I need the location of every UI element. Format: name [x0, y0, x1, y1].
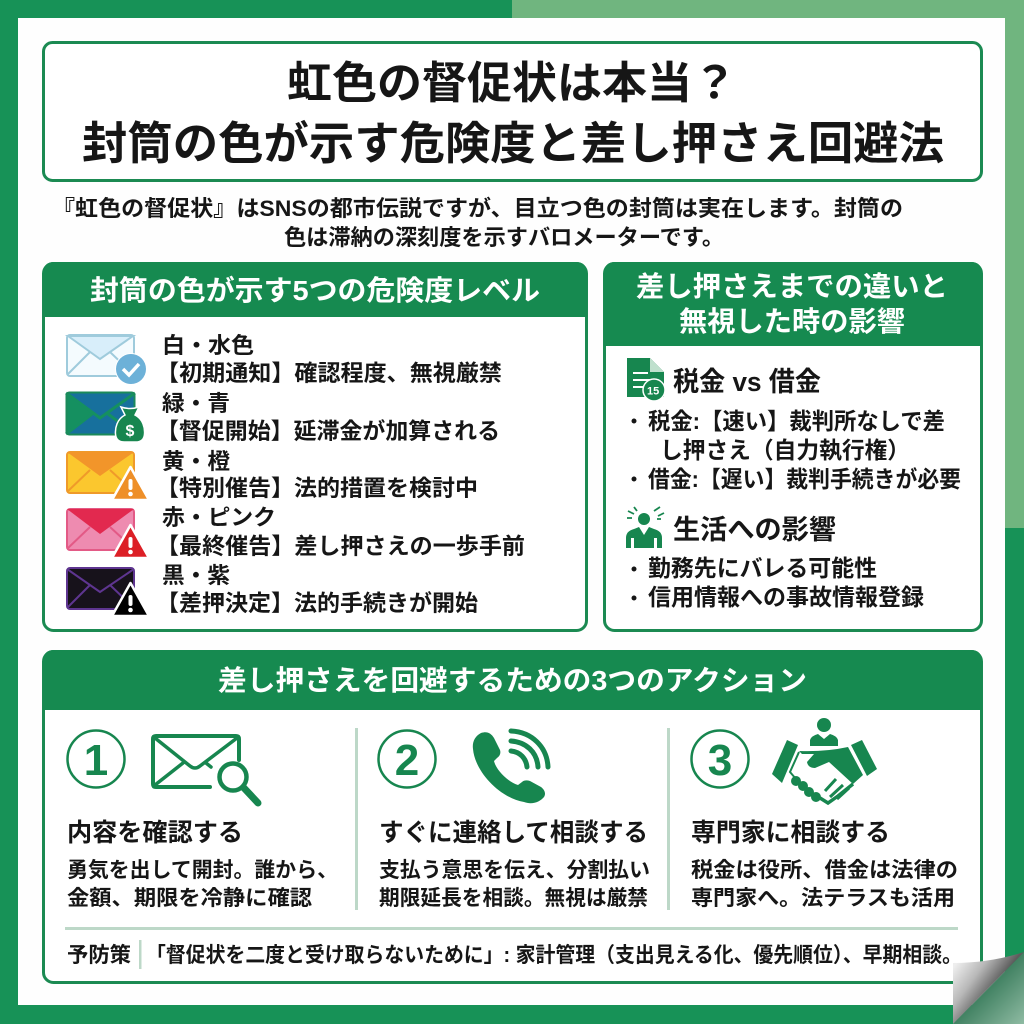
action 1 body: 金額、期限を冷静に確認 [67, 887, 312, 910]
life impact bullets [632, 555, 924, 610]
icon: yellow and orange envelope with warning [67, 452, 149, 500]
heading: tax vs debt: 税金 vs 借金 [673, 367, 821, 397]
action 1 body: 勇気を出して開封。誰から、 [67, 859, 338, 882]
icon: black and purple envelope with warning [67, 568, 149, 616]
page curl [953, 952, 1024, 1024]
action 1 heading: 内容を確認する [67, 819, 243, 847]
level 5 text: 黒・紫 [162, 563, 230, 588]
panel heading: 差し押さえを回避するための3つのアクション [218, 665, 807, 696]
tax and debt bullets [632, 408, 961, 492]
level 5 text: 【差押決定】法的手続きが開始 [156, 590, 478, 616]
intro text [52, 196, 903, 250]
icon: tax document with date [627, 358, 665, 401]
number 2 [378, 730, 436, 788]
action 2 body: 支払う意思を伝え、分割払い [379, 859, 650, 882]
tax and debt bullets: 借金:【遅い】裁判手続きが必要 [648, 466, 961, 492]
panel: three actions [43, 650, 982, 982]
action 3 [667, 718, 958, 910]
number 3 [692, 730, 748, 788]
prevention note: 予防策 [67, 944, 131, 967]
level 1 text [156, 333, 502, 386]
action 1 body [67, 859, 338, 910]
intro text: 色は滞納の深刻度を示すバロメーターです。 [284, 225, 724, 250]
action 1 [67, 730, 338, 910]
level 4 text: 赤・ピンク [162, 505, 276, 530]
icon: green and blue envelope with money bag: $ [126, 423, 134, 440]
title line 2: 封筒の色が示す危険度と差し押さえ回避法 [82, 118, 944, 169]
number 3: 3 [708, 736, 732, 785]
level 2 text [156, 391, 500, 444]
title line 1: 虹色の督促状は本当？ [287, 59, 737, 108]
action 2 body: 期限延長を相談。無視は厳禁 [379, 887, 648, 910]
icon: stressed person [626, 507, 664, 548]
prevention note [67, 940, 962, 969]
heading: impact on life: 生活への影響 [673, 515, 836, 545]
action 2 body [379, 859, 650, 910]
tax and debt bullets: 税金:【速い】裁判所なしで差 [648, 408, 945, 434]
level 2 text: 【督促開始】延滞金が加算される [156, 418, 500, 444]
life impact bullets: 信用情報への事故情報登録 [648, 584, 924, 610]
panel heading: 差し押さえまでの違いと [636, 271, 948, 302]
action 3 body [691, 859, 958, 910]
number 1 [68, 730, 124, 788]
action 3 body: 専門家へ。法テラスも活用 [691, 887, 955, 910]
level 2 text: 緑・青 [162, 391, 230, 416]
icon: white and light blue envelope [67, 335, 147, 385]
action 3 body: 税金は役所、借金は法律の [691, 859, 958, 882]
action 2 [355, 728, 650, 910]
action 2 heading: すぐに連絡して相談する [379, 819, 648, 847]
panel heading: 封筒の色が示す5つの危険度レベル [90, 274, 540, 306]
panel: envelope colour danger levels [43, 262, 587, 630]
intro text: 『虹色の督促状』はSNSの都市伝説ですが、目立つ色の封筒は実在します。封筒の [52, 196, 903, 221]
level 1 text: 【初期通知】確認程度、無視厳禁 [156, 360, 502, 386]
icon: green and blue envelope with money bag [66, 392, 145, 442]
level 5 text [156, 563, 478, 616]
level 4 text [156, 505, 525, 559]
number 2: 2 [395, 736, 419, 785]
icon: phone with signal waves [473, 731, 548, 803]
panel heading: 無視した時の影響 [679, 306, 905, 337]
prevention note: 「督促状を二度と受け取らないために」: 家計管理（支出見える化、優先順位）、早期相談。 [146, 944, 962, 967]
icon: envelope with magnifier [153, 736, 258, 803]
level 4 text: 【最終催告】差し押さえの一歩手前 [156, 533, 525, 559]
tax and debt bullets: し押さえ（自力執行権） [660, 437, 910, 463]
title box [44, 42, 982, 180]
level 3 text: 黄・橙 [162, 449, 230, 474]
level 3 text: 【特別催告】法的措置を検討中 [156, 475, 478, 501]
icon: red and pink envelope with warning [67, 509, 149, 558]
number 1: 1 [84, 736, 108, 785]
life impact bullets: 勤務先にバレる可能性 [648, 555, 877, 581]
panel: differences and impact [604, 262, 982, 630]
panel heading [636, 271, 948, 337]
action 3 heading: 専門家に相談する [691, 819, 890, 847]
icon: handshake with person [772, 718, 877, 803]
level 3 text [156, 449, 478, 501]
icon: tax document with date: 15 [647, 386, 659, 398]
level 1 text: 白・水色 [162, 333, 254, 358]
